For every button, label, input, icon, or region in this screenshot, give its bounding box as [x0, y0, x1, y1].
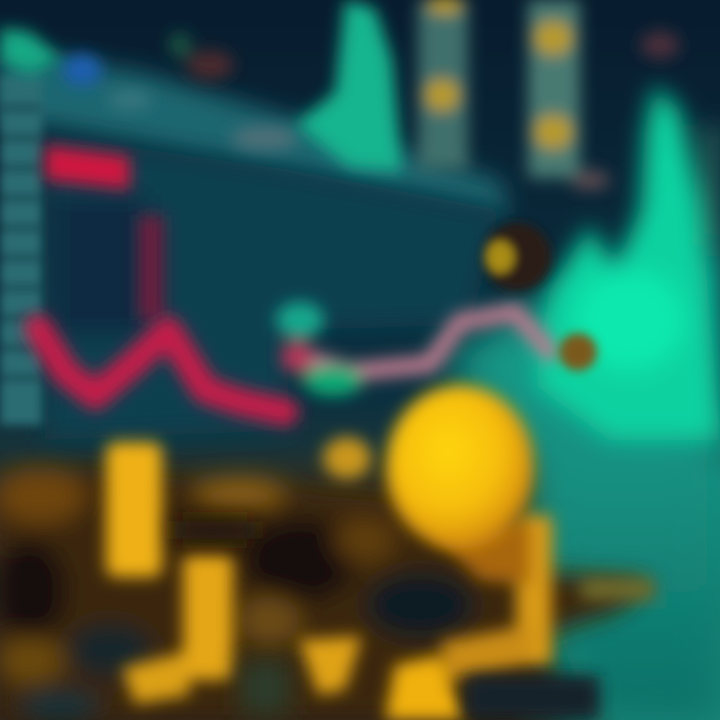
green peak at top centre — [295, 0, 402, 172]
gold coin stacks — [106, 437, 655, 720]
chart panel — [45, 135, 500, 440]
lower right teal field — [440, 240, 720, 720]
diagonal chart header band — [0, 50, 510, 215]
dark gold coin on line — [483, 223, 551, 291]
bottom right dark bar — [465, 675, 600, 720]
right teal base — [490, 390, 720, 720]
red price line — [38, 328, 285, 412]
bottom dark coin pile — [0, 467, 650, 720]
red label block — [45, 145, 130, 190]
towers with yellow lights — [418, 0, 680, 190]
top-left green and blue highlights — [0, 28, 299, 150]
small coin — [559, 333, 597, 371]
right green peak — [535, 85, 720, 440]
left striped axis — [0, 75, 42, 425]
red vertical spike — [138, 215, 164, 320]
pink and green price line — [276, 302, 550, 396]
dark gaps between coins — [175, 520, 290, 715]
large yellow coin — [386, 385, 534, 549]
